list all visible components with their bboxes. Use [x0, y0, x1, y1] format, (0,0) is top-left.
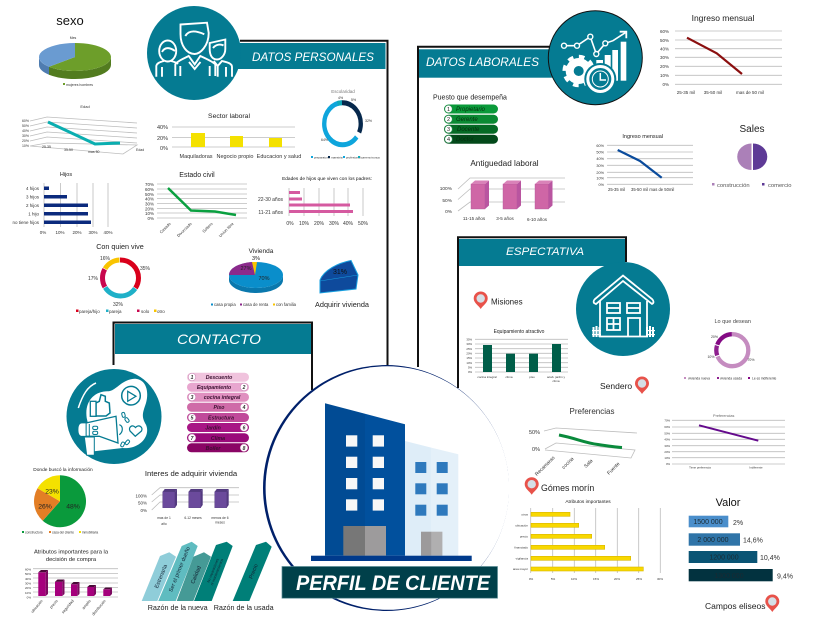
chart: atributos para la decision de compra: 20% [25, 586, 31, 590]
chart: con quien vive donut: 16% [100, 256, 111, 262]
chart: valor bars: Valor [716, 497, 741, 509]
chart: edades de hijos [258, 176, 372, 227]
chart: preferencias 3D line: Recamaras [534, 455, 557, 478]
chart: valor bars: 1300 000 [714, 573, 744, 580]
list: razones pills: 2 [242, 385, 246, 391]
chart: vivienda pie: casa propia [214, 302, 236, 307]
chart: preferencias purple line: 50% [664, 432, 671, 436]
list: razones pills: Boiler [206, 446, 221, 452]
chart: atributos para la decision de compra: Atributos importantes para la [34, 550, 109, 556]
chart: preferencias 3D line: cocina [561, 456, 576, 471]
chart: preferencias purple line: Preferencias [713, 414, 734, 418]
chart: preferencias purple line [664, 414, 785, 470]
chart: atributos importantes bars: 5% [551, 577, 555, 581]
icon: gear and growth chart [548, 11, 642, 105]
chart: sales pie: Sales [739, 124, 765, 135]
chart: preferencias 3D line: Sala [583, 458, 595, 469]
chart: sector laboral [157, 113, 301, 160]
chart: atributos para la decision de compra: decisión de compra [46, 557, 97, 563]
chart: ingreso mensual red: 35-50 mil [704, 90, 722, 95]
chart: atributos para la decision de compra: 60% [25, 568, 31, 572]
list: puesto que desempeña: Gerente [456, 117, 478, 123]
chart: preferencias purple line: Indiferente [749, 466, 763, 470]
chart: hijos bars: 20% [72, 230, 82, 235]
list: razones pills: Clima [211, 436, 225, 442]
chart: interes de adquirir vivienda: menos de 6 [211, 516, 229, 520]
chart: edad 3D line: 40% [22, 129, 29, 133]
chart: valor bars: 10,4% [760, 555, 780, 562]
chart: ingreso mensual blue: 60% [596, 144, 605, 148]
chart: edades de hijos: 0% [286, 221, 294, 227]
chart: ingreso mensual blue: 10% [596, 176, 605, 180]
chart: hijos bars: 10% [55, 230, 65, 235]
chart: ingreso mensual blue: 25-35 mil [608, 187, 625, 192]
chart: ingreso mensual blue: 30% [596, 164, 605, 168]
chart: equipamiento atractivo: clima [505, 375, 513, 379]
chart: hijos bars: 4 hijos [26, 186, 40, 191]
chart: edad 3D line: 50% [22, 124, 29, 128]
chart: ingreso mensual red: 40% [660, 46, 669, 52]
title banner [282, 566, 498, 598]
chart: valor bars: 9,4% [777, 574, 793, 580]
icon: people [147, 6, 241, 100]
chart: ingreso mensual blue [596, 134, 693, 192]
chart: edad 3D line: Edad [136, 148, 144, 152]
chart: lo que desean donut: 70% [747, 358, 755, 362]
chart: sales pie [712, 124, 792, 189]
chart: valor bars: 14,6% [743, 538, 763, 544]
list: puesto que desempeña: Puesto que desempeña [433, 94, 507, 102]
chart: hijos bars: 30% [88, 230, 98, 235]
list: razones pills [187, 373, 249, 452]
chart: adquirir vivienda: Adquirir vivienda [315, 300, 370, 309]
list: puesto que desempeña: 2 [447, 117, 450, 123]
label: campos eliseos [705, 594, 779, 612]
chart: preferencias purple line: 60% [664, 425, 671, 429]
caption: razon de la nueva: Razón de la nueva [148, 603, 208, 612]
chart: sales pie: comercio [768, 183, 792, 189]
chart: vivienda pie: 70% [258, 276, 270, 282]
chart: edades de hijos: 20% [314, 221, 325, 227]
chart: preferencias purple line: 10% [664, 456, 671, 460]
chart: estado civil line: 30% [145, 202, 154, 206]
heading: contacto: CONTACTO [177, 331, 261, 347]
chart: sector laboral: 20% [157, 136, 168, 142]
chart: preferencias 3D line: Preferencias [570, 407, 614, 416]
chart: estado civil line: Casado [158, 221, 172, 234]
chart: ingreso mensual red: 0% [662, 82, 669, 87]
chart: con quien vive donut: pareja/hijo [79, 309, 100, 314]
chart: interes de adquirir vivienda: 6-12 meses [184, 516, 202, 520]
chart: con quien vive donut: 32% [113, 302, 124, 308]
chart: preferencias purple line: 20% [664, 450, 671, 454]
chart: atributos para la decision de compra: seguridad [61, 599, 75, 614]
chart: interes de adquirir vivienda: 100% [135, 494, 147, 498]
chart: con quien vive donut: 17% [88, 276, 99, 282]
chart: escolaridad donut: 64% [321, 138, 328, 142]
chart: edades de hijos: 11-21 años [258, 210, 283, 216]
central emblem: perfil de cliente [263, 365, 509, 611]
chart: donde busco la informacion pie: casa del cliente [52, 530, 74, 534]
chart: edad 3D line: 30% [22, 134, 29, 138]
chart: interes de adquirir vivienda: 50% [138, 500, 147, 506]
list: puesto que desempeña: 1 [447, 107, 450, 113]
chart: hijos bars: 40% [103, 230, 113, 235]
chart: atributos importantes bars: vigilancia [516, 556, 528, 560]
chart: lo que desean donut: 10% [707, 355, 715, 359]
title banner: PERFIL DE CLIENTE [296, 572, 491, 595]
chart: antiguedad laboral: 50% [442, 198, 453, 204]
chart: antiguedad laboral: 11-15 años [463, 216, 486, 221]
chart: donde busco la informacion pie: 23% [45, 488, 59, 496]
chart: interes de adquirir vivienda: 0% [140, 508, 147, 513]
chart: estado civil line: 10% [145, 211, 154, 216]
chart: equipamiento atractivo: piso [529, 375, 535, 379]
chart: preferencias purple line: Tiene preferencia [689, 466, 711, 470]
chart: lo que desean donut: vivienda nueva [688, 376, 710, 380]
chart: escolaridad donut: Escolaridad [331, 89, 355, 94]
chart: donde busco la informacion pie [22, 467, 98, 534]
chart: equipamiento atractivo: 30% [466, 342, 473, 346]
header band: datos laborales [419, 49, 559, 78]
chart: atributos para la decision de compra: 40% [25, 577, 31, 581]
chart: hijos bars: 1 hijo [28, 212, 39, 216]
chart: donde busco la informacion pie: Donde buscó la información [33, 467, 93, 473]
chart: vivienda pie: casa de renta [243, 302, 269, 307]
heading: datos personales: DATOS PERSONALES [252, 52, 374, 64]
list: razones pills: Jardín [205, 426, 221, 432]
chart: donde busco la informacion pie: 48% [66, 504, 80, 510]
chart: vivienda pie: Vivienda [249, 248, 274, 255]
chart: lo que desean donut: Le es indiferente [752, 376, 777, 380]
chart: valor bars: 1200 000 [709, 554, 739, 562]
list: razones pills: 3 [191, 395, 194, 401]
chart: atributos para la decision de compra [25, 550, 118, 616]
list: puesto que desempeña: 4 [447, 137, 450, 143]
chart: sector laboral: Sector laboral [208, 113, 250, 120]
chart: ingreso mensual blue: 40% [596, 157, 605, 161]
chart: edades de hijos: 10% [299, 221, 310, 227]
chart: sexo pie [39, 13, 111, 87]
chart: edad 3D line: mas 50 [88, 150, 100, 154]
heading: datos laborales: DATOS LABORALES [426, 57, 539, 69]
chart: donde busco la informacion pie: 26% [38, 504, 52, 510]
chart: sector laboral: 0% [160, 146, 168, 152]
chart: hijos bars: 0% [40, 230, 46, 235]
chart: sector laboral: Negocio propio [216, 154, 254, 160]
chart: atributos importantes bars: otros [521, 512, 528, 516]
chart: equipamiento atractivo: 25% [466, 347, 473, 351]
chart: preferencias purple line: 0% [666, 462, 671, 466]
chart: edades de hijos: 30% [329, 221, 340, 227]
chart: con quien vive donut: pareja [109, 309, 122, 314]
chart: con quien vive donut: otro [157, 309, 165, 314]
chart: escolaridad donut: 5% [351, 98, 356, 102]
chart: lo que desean donut: Lo que desean [714, 319, 751, 325]
chart: ingreso mensual red: 60% [660, 29, 669, 34]
chart: valor bars: 2 000 000 [697, 537, 729, 544]
chart: equipamiento atractivo: 10% [466, 361, 473, 365]
caption: razon de la usada: Razón de la usada [214, 603, 274, 612]
chart: razones arrows: Ser el primer dueño [168, 546, 192, 593]
panel: datos personales [12, 6, 388, 367]
chart: equipamiento atractivo: cocina integral [477, 375, 497, 379]
chart: atributos importantes bars: 0% [529, 577, 533, 581]
chart: interes de adquirir vivienda: año [161, 522, 167, 526]
chart: atributos para la decision de compra: precio [49, 599, 59, 610]
chart: equipamiento atractivo: 15% [466, 356, 473, 360]
chart: atributos importantes bars: 10% [571, 577, 577, 581]
panel: datos laborales [418, 11, 792, 367]
chart: donde busco la informacion pie: inmobiliaria [82, 530, 98, 534]
chart: equipamiento atractivo: acab. jardín y [547, 375, 566, 379]
chart: ingreso mensual blue: 0% [598, 183, 605, 187]
chart: escolaridad donut [311, 89, 380, 160]
header band: datos personales [230, 43, 386, 69]
chart: con quien vive donut: 35% [140, 266, 151, 272]
list: razones pills: 4 [242, 405, 246, 411]
chart: ingreso mensual blue: 35-50 mil mas de 50mil [631, 187, 674, 192]
chart: estado civil line: Divorciado [176, 221, 193, 238]
chart: estado civil line: 20% [145, 206, 154, 212]
chart: estado civil line: 40% [145, 196, 154, 202]
chart: preferencias 3D line: 50% [529, 430, 540, 436]
chart: interes de adquirir vivienda: Interes de adquirir vivienda [145, 469, 238, 478]
chart: edad 3D line: 20% [22, 139, 29, 143]
list: razones pills: Equipamiento [197, 385, 231, 391]
list: puesto que desempeña [433, 94, 507, 144]
chart: interes de adquirir vivienda [135, 469, 239, 526]
list: razones pills: 8 [243, 446, 246, 452]
chart: antiguedad laboral: Antiguedad laboral [470, 159, 539, 168]
chart: interes de adquirir vivienda: mas de 1 [157, 516, 171, 520]
chart: vivienda pie [211, 248, 297, 307]
chart: equipamiento atractivo: clima [552, 379, 560, 383]
chart: atributos importantes bars: ubicación [515, 524, 528, 528]
chart: estado civil line [145, 172, 247, 238]
chart: adquirir vivienda [315, 260, 370, 309]
chart: edades de hijos: 50% [358, 221, 369, 227]
chart: preferencias purple line: 30% [664, 444, 671, 448]
chart: ingreso mensual red [660, 13, 782, 95]
chart: ingreso mensual red: 50% [660, 38, 669, 43]
chart: hijos bars: Hijos [60, 172, 72, 178]
chart: preferencias purple line: 70% [664, 418, 671, 422]
chart: preferencias 3D line: 0% [532, 447, 540, 453]
chart: edad 3D line: Edad [80, 104, 90, 109]
header band: contacto [115, 324, 311, 354]
chart: sector laboral: Maquiladoras [179, 154, 213, 160]
panel: contacto [22, 322, 312, 616]
panel: espectativa [458, 237, 793, 612]
chart: escolaridad donut: carrera trunca [361, 156, 380, 160]
chart: equipamiento atractivo: 20% [466, 352, 473, 356]
chart: hijos bars: no tiene hijos [12, 220, 40, 225]
chart: antiguedad laboral: 0% [445, 209, 453, 215]
chart: ingreso mensual red: 25-35 mil [677, 90, 695, 95]
chart: atributos para la decision de compra: amplio [82, 599, 92, 610]
chart: estado civil line: Soltero [201, 221, 214, 234]
chart: estado civil line: Estado civil [179, 172, 215, 179]
chart: sales pie: construcción [717, 183, 750, 189]
label: misiones [474, 292, 523, 309]
chart: escolaridad donut: profesional [346, 156, 361, 160]
chart: ingreso mensual red: 30% [660, 55, 669, 60]
chart: atributos importantes bars: area mayor [513, 567, 528, 571]
chart: atributos para la decision de compra: 0% [27, 596, 31, 600]
list: puesto que desempeña: 3 [447, 127, 450, 133]
icon: social media megaphone [66, 369, 162, 464]
list: puesto que desempeña: Docente [457, 127, 480, 133]
chart: equipamiento atractivo: 35% [466, 338, 473, 342]
header band: espectativa [459, 239, 625, 266]
chart: donde busco la informacion pie: constructora [25, 530, 43, 534]
chart: antiguedad laboral: 100% [440, 186, 453, 192]
chart: atributos importantes bars: Atributos importantes [565, 499, 611, 505]
chart: sector laboral: 40% [157, 125, 168, 131]
chart: lo que desean donut: vivienda usada [720, 376, 742, 380]
chart: atributos para la decision de compra: distribución [91, 599, 107, 616]
chart: atributos importantes bars: 20% [614, 577, 620, 581]
chart: vivienda pie: 27% [240, 266, 252, 272]
chart: preferencias 3D line [529, 407, 637, 478]
icon: buildings [311, 403, 472, 561]
list: razones pills: 1 [191, 375, 194, 381]
chart: preferencias purple line: 40% [664, 438, 671, 442]
chart: sexo pie: mujeres hombres [66, 83, 93, 87]
chart: estado civil line: 0% [147, 216, 154, 221]
chart: hijos bars: 2 hijos [26, 203, 40, 208]
list: puesto que desempeña: Propietario [456, 107, 486, 113]
chart: atributos para la decision de compra: 30% [25, 582, 31, 586]
chart: edad 3D line: 60% [22, 119, 29, 123]
chart: lo que desean donut [684, 319, 777, 380]
chart: escolaridad donut: 4% [338, 96, 343, 100]
chart: ingreso mensual red: 10% [660, 73, 669, 78]
chart: escolaridad donut: preparatoria [314, 156, 331, 160]
chart: sexo pie: Mes [70, 36, 77, 40]
chart: hijos bars [12, 172, 113, 235]
chart: vivienda pie: 3% [252, 256, 260, 262]
chart: ingreso mensual blue: 20% [596, 171, 605, 175]
chart: antiguedad laboral: 6-10 años [527, 217, 548, 222]
list: puesto que desempeña: Doctor [456, 137, 475, 143]
icon: house [576, 262, 670, 356]
chart: atributos para la decision de compra: 10% [25, 591, 31, 595]
chart: ingreso mensual red: Ingreso mensual [692, 13, 755, 23]
label: gomes morin: Gómes morín [541, 483, 594, 493]
list: razones pills: Piso [214, 405, 224, 411]
chart: razones arrows: Estrenarla [154, 563, 169, 589]
chart: antiguedad laboral: 3-5 años [496, 216, 515, 221]
chart: escolaridad donut: maestria [331, 156, 343, 160]
chart: equipamiento atractivo: 5% [468, 366, 473, 370]
chart: estado civil line: 70% [145, 182, 154, 187]
chart: valor bars [689, 497, 793, 581]
chart: vivienda pie: con familia [276, 302, 297, 307]
list: razones pills: 7 [191, 436, 194, 442]
chart: escolaridad donut: 32% [365, 119, 372, 123]
list: razones pills: Descuento [206, 375, 232, 381]
chart: atributos importantes bars: financiado [514, 546, 528, 550]
chart: ingreso mensual red: 20% [660, 64, 669, 69]
chart: razones arrows: No reparaciones [206, 558, 220, 583]
chart: atributos para la decision de compra: 50% [25, 572, 31, 576]
label: sendero [600, 376, 649, 394]
chart: valor bars: 1500 000 [693, 519, 723, 526]
chart: edades de hijos: Edades de hijos que viven con los padres: [282, 176, 372, 182]
chart: ingreso mensual red: mas de 50 mil [736, 90, 764, 95]
chart: edades de hijos: 40% [343, 221, 354, 227]
chart: estado civil line: Union libre [218, 221, 235, 238]
chart: preferencias 3D line: Fuente [606, 461, 622, 476]
label: misiones: Misiones [491, 298, 523, 306]
list: razones pills: 6 [243, 426, 246, 432]
chart: lo que desean donut: 20% [711, 335, 718, 339]
chart: antiguedad laboral [440, 159, 565, 222]
chart: equipamiento atractivo: 0% [468, 370, 473, 374]
chart: sexo pie: sexo [56, 13, 84, 28]
chart: razones arrows: ni mantenimientos [210, 558, 224, 586]
chart: adquirir vivienda: 31% [333, 269, 347, 276]
chart: ingreso mensual blue: 50% [596, 150, 605, 154]
chart: atributos importantes bars: 15% [593, 577, 599, 581]
chart: razones arrows [142, 542, 274, 612]
chart: razones arrows: Calidad [190, 565, 203, 585]
heading: espectativa: ESPECTATIVA [506, 246, 584, 258]
chart: atributos importantes bars: 25% [636, 577, 642, 581]
chart: edades de hijos: 22-30 años [258, 197, 283, 203]
chart: estado civil line: 50% [145, 192, 154, 197]
list: razones pills: Estructura [208, 416, 234, 422]
chart: sector laboral: Educacion y salud [257, 154, 301, 160]
chart: atributos importantes bars: precio [520, 534, 528, 538]
chart: edad 3D line: 35-50 [64, 148, 73, 152]
label: gomes morin [525, 477, 594, 495]
label: sendero: Sendero [600, 381, 632, 391]
chart: edad 3D line: 10% [22, 144, 29, 148]
chart: atributos importantes bars [513, 499, 663, 581]
chart: con quien vive donut: solo [141, 309, 150, 314]
chart: edad 3D line: 25-35 [42, 145, 51, 149]
chart: interes de adquirir vivienda: meses [215, 520, 225, 524]
chart: atributos importantes bars: 30% [657, 577, 663, 581]
chart: edad 3D line [22, 104, 144, 154]
chart: con quien vive donut: Con quien vive [96, 242, 144, 251]
list: razones pills: cocina integral [204, 395, 241, 401]
label: campos eliseos: Campos eliseos [705, 601, 765, 611]
chart: valor bars: 2% [733, 520, 743, 527]
chart: estado civil line: 60% [145, 187, 154, 192]
chart: razones arrows: Precio [248, 563, 260, 580]
chart: equipamiento atractivo: Equipamiento atractivo [494, 329, 545, 335]
chart: hijos bars: 3 hijos [26, 194, 40, 200]
chart: ingreso mensual blue: Ingreso mensual [622, 134, 663, 140]
list: razones pills: 5 [191, 416, 194, 422]
chart: equipamiento atractivo [466, 329, 568, 383]
chart: con quien vive donut [76, 242, 165, 314]
chart: atributos para la decision de compra: ubicación [30, 599, 44, 614]
